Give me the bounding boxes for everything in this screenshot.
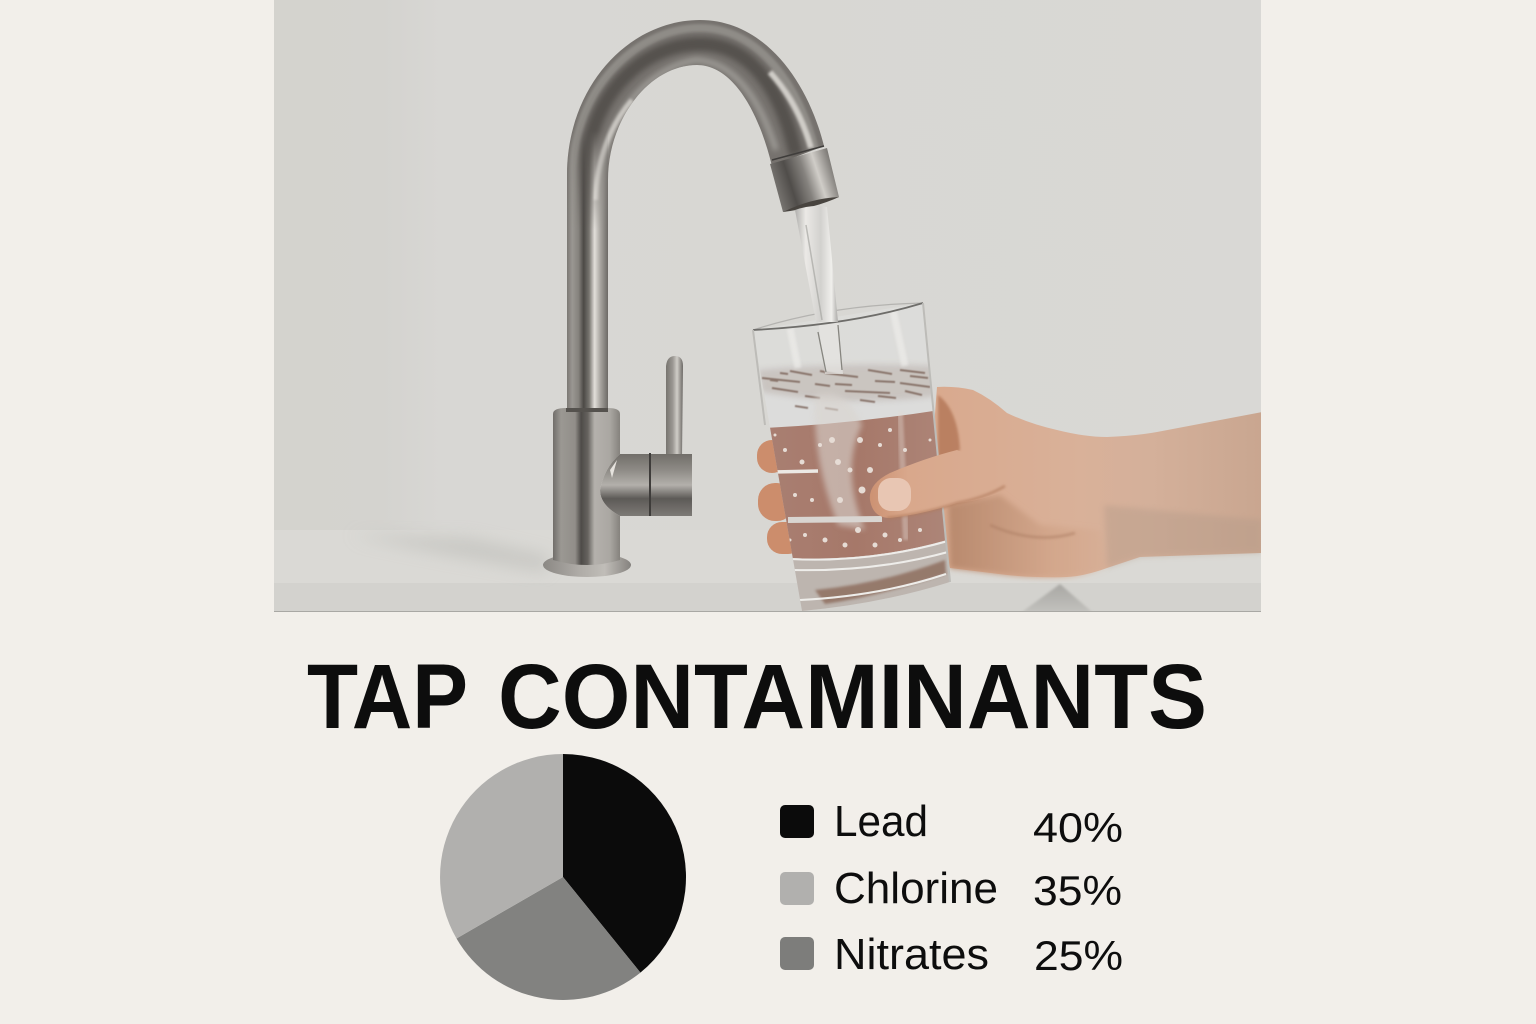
wrist shading xyxy=(1104,505,1262,568)
water stream inside glass xyxy=(818,320,843,374)
hand and arm xyxy=(930,387,1262,577)
side handle xyxy=(600,453,692,516)
foam dashes xyxy=(762,370,930,410)
slice: nitrates 25% xyxy=(456,877,640,1000)
glass reflections xyxy=(790,310,905,368)
faucet xyxy=(543,10,840,577)
legend row: chlorine: Chlorine xyxy=(834,864,998,913)
foam band xyxy=(758,365,937,401)
legend row: nitrates: Nitrates xyxy=(834,930,989,979)
aerator xyxy=(770,146,839,212)
base rings xyxy=(790,541,948,600)
wall xyxy=(274,0,1261,532)
legend row: lead xyxy=(780,797,1123,851)
legend row: chlorine: 35% xyxy=(1033,867,1122,914)
photo bottom edge xyxy=(274,611,1261,612)
legend row: lead: 40% xyxy=(1033,804,1123,851)
water stream xyxy=(795,206,838,322)
countertop surface xyxy=(274,530,1261,584)
drinking glass xyxy=(753,303,952,612)
shaded lower palm xyxy=(948,495,1107,577)
faucet shadow on counter xyxy=(402,536,545,570)
clear water band xyxy=(755,364,945,432)
tinted glass bottom xyxy=(815,560,946,604)
tinted water xyxy=(765,410,947,559)
sink shadow xyxy=(1022,584,1092,612)
shadow between glass and palm xyxy=(938,395,960,462)
slice: chlorine 35% xyxy=(440,754,563,938)
clear glass base xyxy=(790,540,952,612)
legend row: nitrates xyxy=(780,930,1123,979)
thumbnail xyxy=(878,478,911,511)
title: CONTAMINANTS xyxy=(498,646,1207,748)
palm crease xyxy=(990,525,1075,538)
legend row: chlorine xyxy=(780,864,1122,914)
spout tube xyxy=(567,20,824,408)
faucet body xyxy=(553,408,620,565)
thumb underside shadow xyxy=(887,486,1005,518)
thumb xyxy=(870,450,1015,518)
base flange xyxy=(543,557,631,577)
bubbles xyxy=(774,428,932,548)
glass rim and sides xyxy=(753,303,950,582)
legend xyxy=(780,797,1123,979)
countertop front edge xyxy=(274,583,1261,612)
infographic canvas xyxy=(274,0,1261,1000)
bubble column xyxy=(815,393,865,530)
legend row: lead: Lead xyxy=(834,797,928,846)
slice: lead 40% xyxy=(563,754,686,973)
photo: tap filling a glass of cloudy water xyxy=(274,0,1262,612)
white tide lines xyxy=(773,471,818,472)
title: TAP xyxy=(307,646,468,748)
legend row: nitrates: 25% xyxy=(1034,932,1123,979)
hand: back fingers xyxy=(757,440,792,554)
glass tint xyxy=(772,440,945,553)
lever xyxy=(666,356,683,458)
pie chart xyxy=(440,754,686,1000)
